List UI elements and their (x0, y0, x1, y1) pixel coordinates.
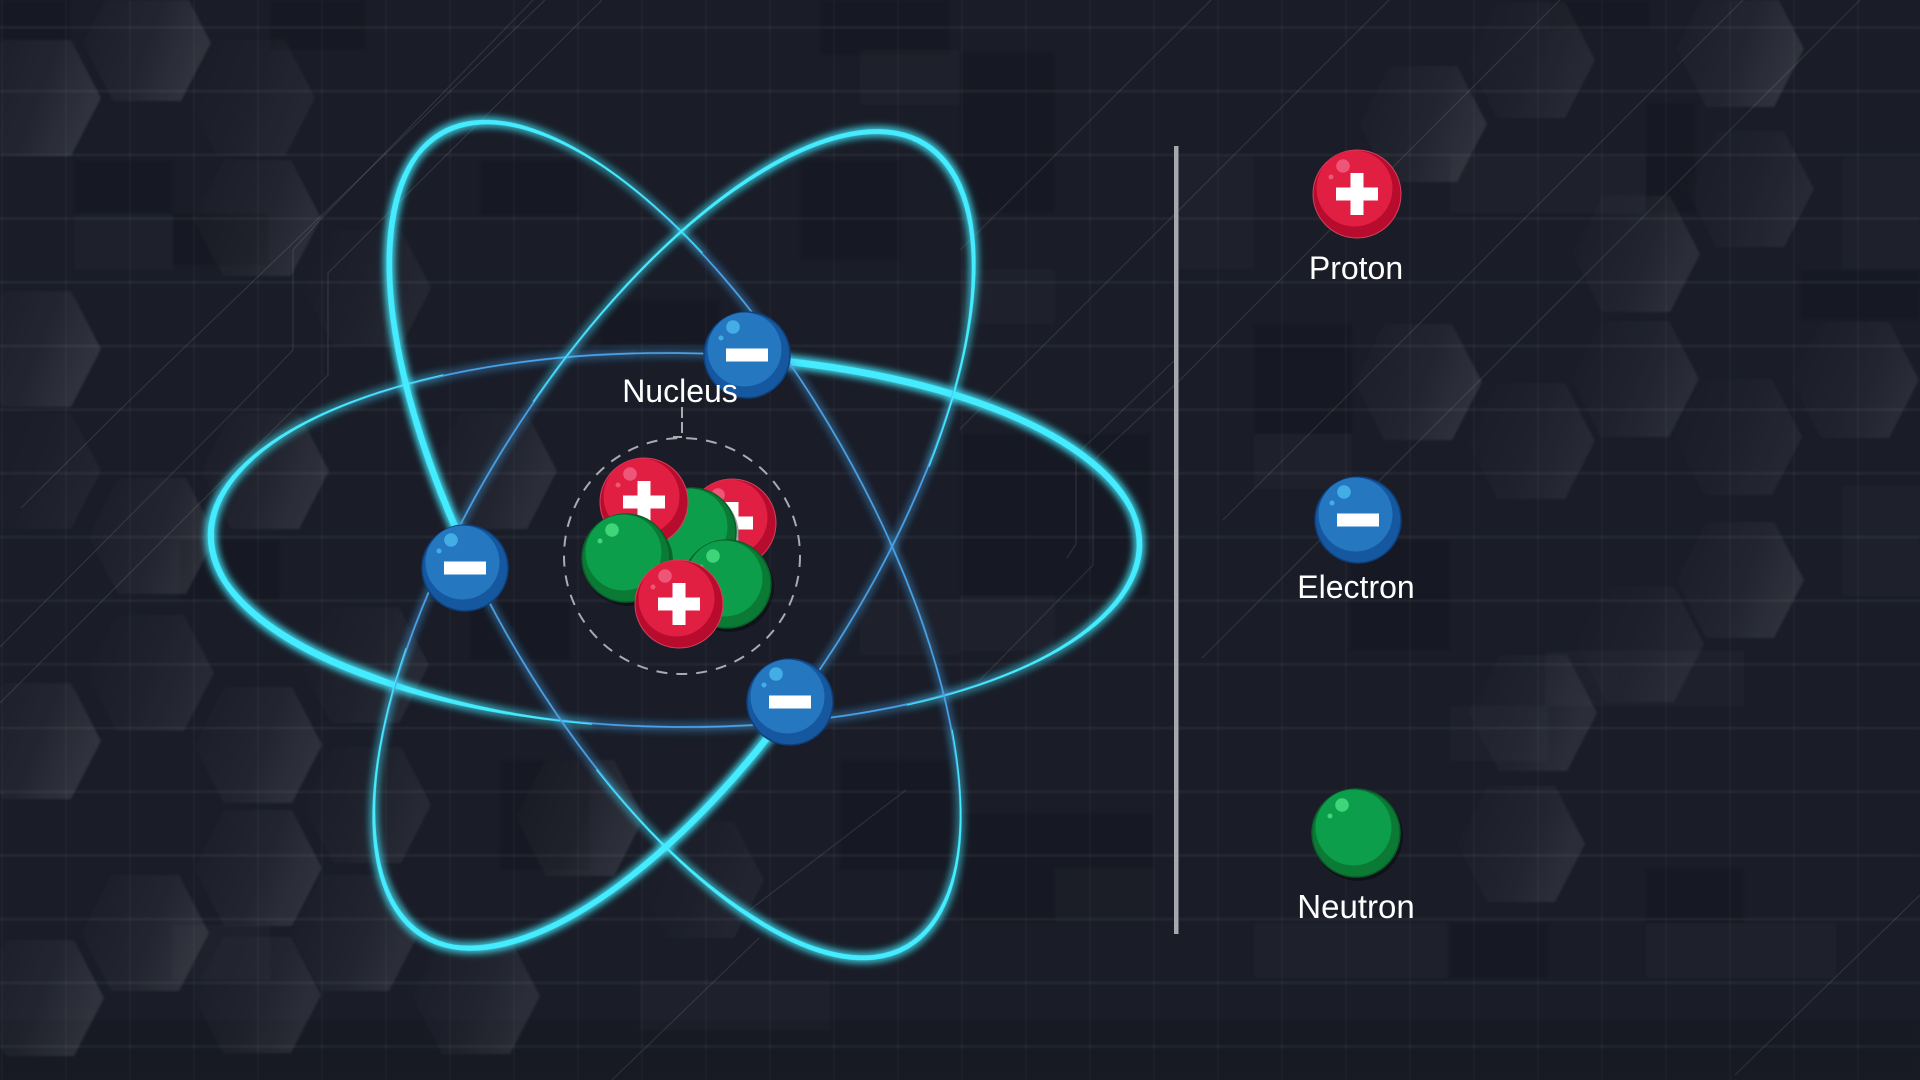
legend: proton (1309, 150, 1403, 286)
legend: electron (1297, 477, 1415, 605)
proton top left (600, 458, 688, 546)
proton back right (688, 479, 776, 567)
neutron left (582, 514, 673, 606)
proton front (635, 560, 723, 648)
atom diagram (206, 36, 1144, 1044)
nucleus label: Nucleus (622, 373, 738, 409)
electron top (704, 312, 790, 398)
legend (1297, 150, 1415, 925)
nucleus connector line (673, 407, 682, 437)
vertical divider (1174, 146, 1178, 934)
neutron right (683, 540, 774, 632)
orbit: ellipse tilted up-right (258, 39, 1090, 1041)
legend: proton: Proton (1309, 250, 1403, 286)
nucleus particle cluster (582, 458, 776, 648)
nucleus boundary dashed circle (564, 438, 800, 674)
neutron back (648, 488, 739, 580)
orbit: ellipse tilted down-right (274, 36, 1074, 1044)
legend: electron: Electron (1297, 569, 1415, 605)
legend: neutron (1297, 789, 1415, 925)
electron left (422, 525, 508, 611)
orbit: horizontal ellipse (206, 348, 1144, 732)
electron bottom right (747, 659, 833, 745)
legend: neutron: Neutron (1297, 888, 1415, 925)
